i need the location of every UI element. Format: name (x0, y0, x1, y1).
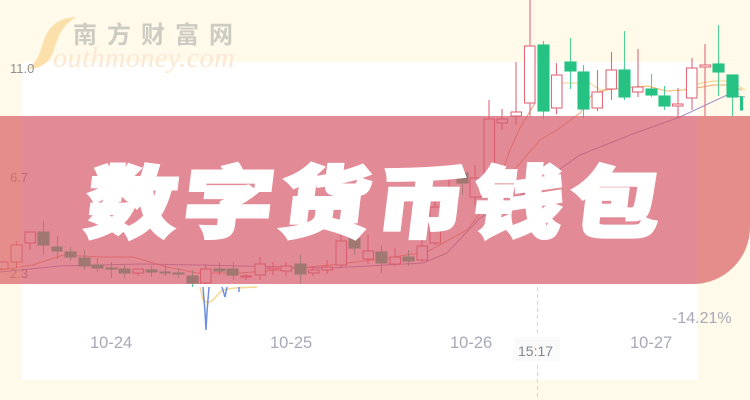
red hollow candles (0, 0, 710, 284)
watermark: southmoney logo (27, 17, 243, 74)
date labels: 10-27 (630, 334, 672, 352)
band edge tint left (0, 116, 22, 284)
background panel: white chart area (22, 62, 698, 380)
candlestick chart (0, 0, 745, 287)
date labels: 10-25 (270, 334, 312, 352)
axis labels (10, 61, 34, 281)
crosshair time label: 15:17 (518, 343, 553, 359)
green candles (38, 25, 742, 287)
crosshair time label (514, 337, 560, 361)
date labels: 10-24 (90, 334, 132, 352)
watermark: southmoney logo: 南方财富网 (73, 21, 243, 49)
crosshair dashed line (536, 287, 538, 400)
date labels (90, 334, 672, 352)
band edge tint right (698, 116, 750, 284)
axis labels: 6.7 (10, 170, 28, 185)
lower indicator lines (200, 287, 257, 330)
axis labels: 11.0 (10, 61, 34, 76)
watermark: southmoney logo: outhmoney.com (53, 43, 235, 74)
title: 数字货币钱包 (81, 141, 674, 254)
percent label: -14.21% (672, 310, 732, 327)
pink title band (0, 116, 750, 284)
moving average lines (0, 81, 745, 273)
axis labels: 2.3 (10, 266, 28, 281)
date labels: 10-26 (450, 334, 492, 352)
